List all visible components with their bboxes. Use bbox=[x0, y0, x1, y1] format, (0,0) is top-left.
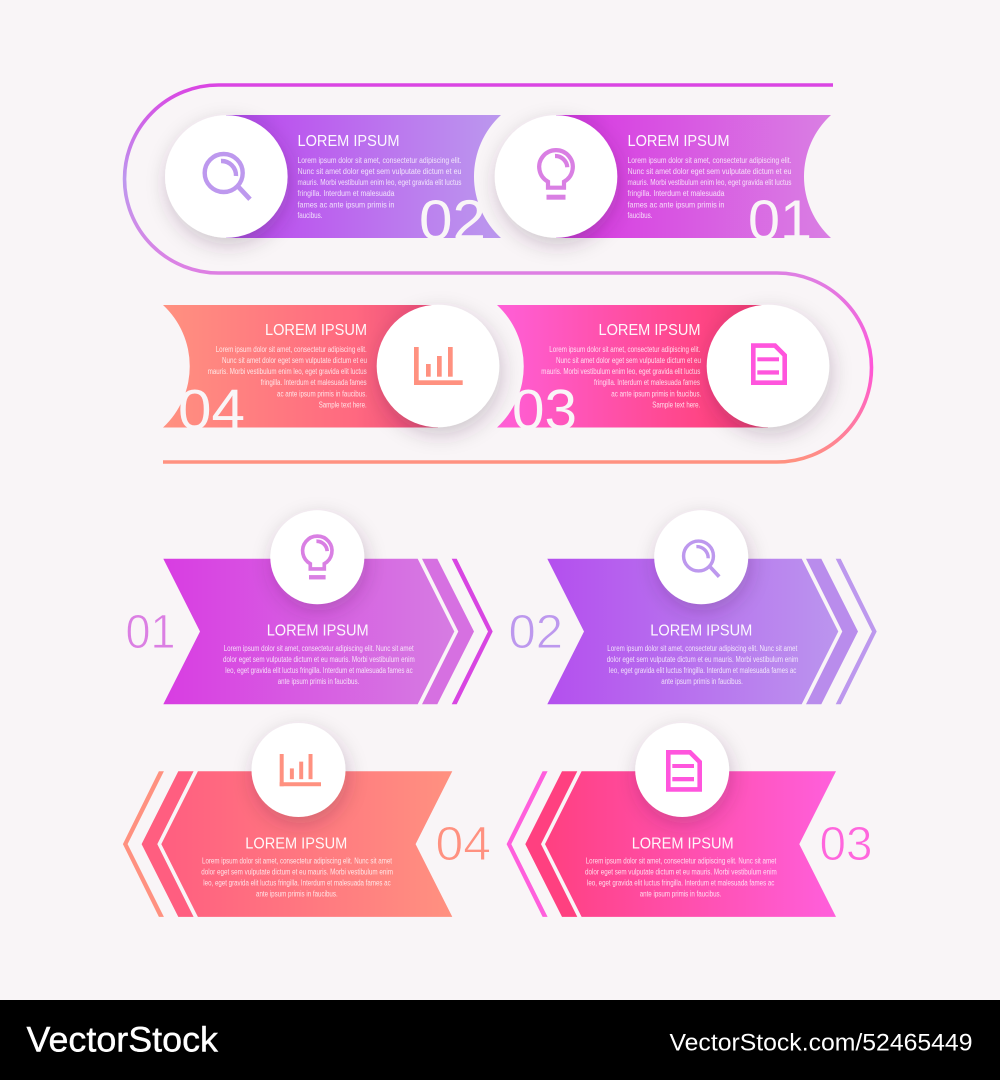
text block bbox=[585, 856, 777, 898]
text block: leo, eget gravida elit luctus fringilla. Interdum et malesuada fames ac bbox=[225, 666, 413, 675]
text block: fringilla. Interdum et malesuada fames bbox=[261, 378, 367, 387]
text block: Lorem ipsum dolor sit amet, consectetur adipiscing elit. bbox=[298, 156, 462, 165]
panel: chevron 02 bbox=[547, 559, 877, 704]
icon: light bulb bbox=[539, 150, 573, 200]
text block: Lorem ipsum dolor sit amet, consectetur adipiscing elit. bbox=[628, 156, 792, 165]
text block bbox=[201, 856, 393, 898]
number label 02: 02 bbox=[508, 606, 563, 659]
circle: banner 01 bbox=[495, 115, 617, 238]
text block: Lorem ipsum dolor sit amet, consectetur adipiscing elit. Nunc sit amet bbox=[202, 856, 393, 866]
text block: Lorem ipsum dolor sit amet, consectetur adipiscing elit. Nunc sit amet bbox=[586, 856, 777, 866]
circle: chevron 01 bbox=[270, 510, 364, 604]
text block bbox=[208, 345, 367, 410]
heading: LOREM IPSUM bbox=[298, 133, 400, 150]
icon: magnifier bbox=[205, 154, 250, 199]
text block bbox=[607, 644, 799, 686]
circle: banner 03 bbox=[707, 305, 829, 427]
footer logo: VectorStock bbox=[26, 1020, 219, 1060]
icon: document bbox=[753, 346, 785, 383]
icon: bar chart bbox=[414, 347, 463, 385]
text block: Nunc sit amet dolor eget sem vulputate dictum et eu bbox=[556, 356, 701, 365]
text block: Lorem ipsum dolor sit amet, consectetur adipiscing elit. bbox=[549, 345, 700, 354]
circle: chevron 04 bbox=[252, 723, 346, 817]
text block: Nunc sit amet dolor eget sem vulputate dictum et eu bbox=[222, 356, 367, 365]
text block: fringilla. Interdum et malesuada bbox=[298, 189, 395, 198]
heading: LOREM IPSUM bbox=[598, 322, 700, 339]
number label 03: 03 bbox=[820, 818, 872, 871]
icon: bar chart bbox=[280, 754, 321, 786]
text block: mauris. Morbi vestibulum enim leo, eget gravida elit luctus bbox=[298, 178, 462, 187]
panel: banner 01 bbox=[556, 115, 831, 238]
text block: dolor eget sem vulputate dictum et eu mauris. Morbi vestibulum enim bbox=[201, 868, 393, 876]
timeline track bbox=[125, 85, 872, 462]
text block: ac ante ipsum primis in faucibus. bbox=[611, 390, 701, 398]
panel: chevron 03 bbox=[507, 771, 836, 917]
text block: dolor eget sem vulputate dictum et eu mauris. Morbi vestibulum enim bbox=[607, 655, 799, 664]
number 02: 02 bbox=[419, 188, 486, 252]
text block bbox=[541, 345, 701, 410]
text block: faucibus. bbox=[298, 211, 322, 220]
number label 04: 04 bbox=[436, 818, 491, 871]
text block: ante ipsum primis in faucibus. bbox=[640, 890, 721, 898]
footer url: VectorStock.com/52465449 bbox=[670, 1030, 972, 1056]
text block: mauris. Morbi vestibulum enim leo, eget gravida elit luctus bbox=[541, 367, 700, 376]
text block: ante ipsum primis in faucibus. bbox=[661, 677, 743, 686]
heading: LOREM IPSUM bbox=[267, 623, 369, 640]
number 01: 01 bbox=[748, 188, 812, 252]
number 04: 04 bbox=[178, 378, 245, 442]
text block: Lorem ipsum dolor sit amet, consectetur adipiscing elit. bbox=[216, 345, 367, 354]
panel: banner 04 bbox=[163, 305, 438, 428]
text block: mauris. Morbi vestibulum enim leo, eget gravida elit luctus bbox=[628, 178, 792, 187]
text block: fringilla. Interdum et malesuada fames bbox=[594, 378, 700, 387]
circle: banner 04 bbox=[377, 305, 499, 427]
circle: chevron 02 bbox=[654, 510, 748, 604]
text block: dolor eget sem vulputate dictum et eu mauris. Morbi vestibulum enim bbox=[223, 655, 415, 664]
circle: banner 02 bbox=[165, 115, 288, 238]
panel: banner 03 bbox=[497, 305, 768, 428]
text block: fringilla. Interdum et malesuada bbox=[628, 189, 725, 198]
text block bbox=[298, 156, 462, 220]
text block: Sample text here. bbox=[319, 400, 367, 410]
text block: Nunc sit amet dolor eget sem vulputate dictum et eu bbox=[298, 167, 462, 176]
panel: chevron 01 bbox=[163, 559, 493, 704]
text block: ante ipsum primis in faucibus. bbox=[278, 677, 359, 686]
text block: leo, eget gravida elit luctus fringilla. Interdum et malesuada fames ac bbox=[609, 666, 796, 675]
circle: chevron 03 bbox=[635, 723, 729, 817]
icon: magnifier bbox=[684, 541, 719, 577]
text block: dolor eget sem vulputate dictum et eu mauris. Morbi vestibulum enim bbox=[585, 868, 777, 876]
panel: chevron 04 bbox=[123, 771, 452, 917]
text block: faucibus. bbox=[628, 211, 652, 220]
heading: LOREM IPSUM bbox=[245, 835, 347, 852]
text block bbox=[628, 156, 792, 220]
text block: Lorem ipsum dolor sit amet, consectetur adipiscing elit. Nunc sit amet bbox=[607, 644, 798, 653]
heading: LOREM IPSUM bbox=[265, 322, 367, 339]
text block: fames ac ante ipsum primis in bbox=[298, 200, 394, 210]
text block bbox=[223, 644, 415, 686]
number 03: 03 bbox=[512, 378, 577, 442]
text block: mauris. Morbi vestibulum enim leo, eget gravida elit luctus bbox=[208, 367, 367, 376]
icon: light bulb bbox=[303, 536, 332, 579]
icon: document bbox=[668, 752, 700, 789]
text block: leo, eget gravida elit luctus fringilla. Interdum et malesuada fames ac bbox=[587, 878, 774, 888]
footer band bbox=[0, 1000, 1000, 1080]
text block: ante ipsum primis in faucibus. bbox=[256, 890, 338, 898]
number label 01: 01 bbox=[126, 606, 176, 659]
text block: Lorem ipsum dolor sit amet, consectetur adipiscing elit. Nunc sit amet bbox=[224, 644, 414, 653]
heading: LOREM IPSUM bbox=[650, 623, 752, 640]
text block: Nunc sit amet dolor eget sem vulputate dictum et eu bbox=[628, 167, 792, 176]
panel: banner 02 bbox=[226, 115, 501, 238]
text block: leo, eget gravida elit luctus fringilla. Interdum et malesuada fames ac bbox=[203, 878, 391, 888]
text block: Sample text here. bbox=[652, 400, 700, 410]
heading: LOREM IPSUM bbox=[628, 133, 730, 150]
text block: ac ante ipsum primis in faucibus. bbox=[277, 390, 367, 398]
heading: LOREM IPSUM bbox=[632, 835, 734, 852]
text block: fames ac ante ipsum primis in bbox=[628, 200, 724, 210]
